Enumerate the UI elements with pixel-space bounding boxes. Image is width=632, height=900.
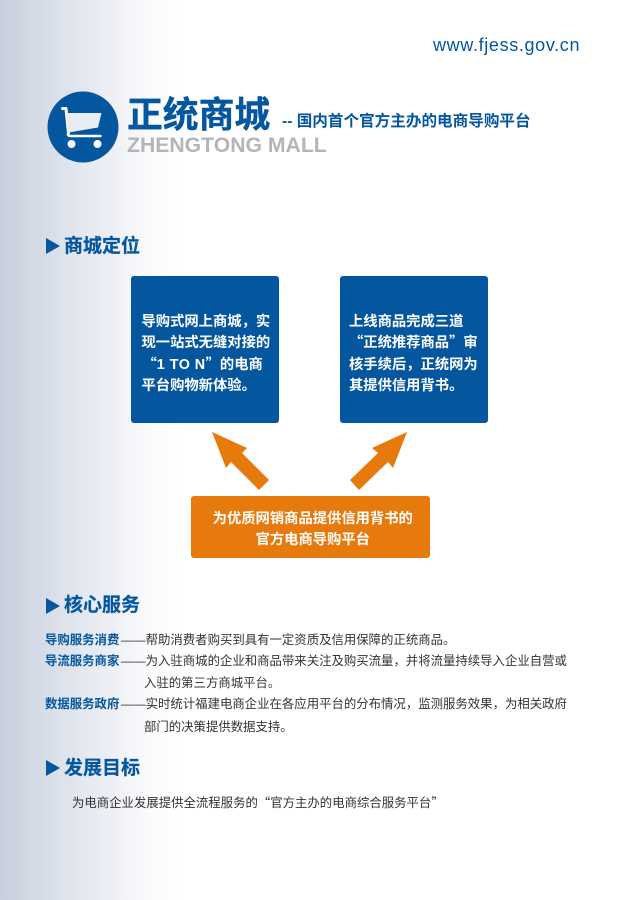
right box text: 上线商品完成三道 xyxy=(349,314,463,330)
left box text: 导购式网上商城，实 xyxy=(142,310,270,331)
english title: ZHENGTONG MALL xyxy=(127,134,327,157)
left box text: 现一站式无缝对接的 xyxy=(142,335,270,351)
title: 正统商城 xyxy=(127,95,270,135)
orange box text: 官方电商导购平台 xyxy=(256,532,370,548)
website url: www.fjess.gov.cn xyxy=(433,35,580,55)
orange box text xyxy=(213,510,413,548)
service 3 continued: 部门的决策提供数据支持。 xyxy=(144,720,293,734)
service 1: 导购服务消费——帮助消费者购买到具有一定资质及信用保障的正统商品。 xyxy=(45,633,455,647)
service 3: 数据服务政府——实时统计福建电商企业在各应用平台的分布情况，监测服务效果，为相关政府 xyxy=(45,694,567,712)
service 2: 导流服务商家——为入驻商城的企业和商品带来关注及购买流量，并将流量持续导入企业自营或 xyxy=(45,651,567,669)
goals text: 为电商企业发展提供全流程服务的“官方主办的电商综合服务平台” xyxy=(72,793,444,811)
heading: positioning: 商城定位 xyxy=(64,236,140,256)
left box text: “1 TO N”的电商 xyxy=(142,353,263,374)
heading: core services: 核心服务 xyxy=(64,595,140,616)
section marker: core services xyxy=(46,598,60,614)
service 2 continued: 入驻的第三方商城平台。 xyxy=(144,676,280,690)
subtitle: -- 国内首个官方主办的电商导购平台 xyxy=(282,113,531,130)
panel: left blue box xyxy=(131,276,279,423)
left box text: 平台购物新体验。 xyxy=(142,378,256,394)
panel: orange box xyxy=(191,496,430,558)
section marker: goals xyxy=(46,760,60,776)
right box text xyxy=(349,314,478,394)
section marker: positioning xyxy=(46,238,60,254)
right box text: 核手续后，正统网为 xyxy=(349,353,478,374)
panel: right blue box xyxy=(340,276,488,423)
right box text: “正统推荐商品”审 xyxy=(349,331,478,352)
left box text xyxy=(142,310,270,394)
heading: goals: 发展目标 xyxy=(64,758,140,779)
arrow: orange up-right xyxy=(350,432,407,490)
icon: shopping cart badge xyxy=(48,92,118,162)
orange box text: 为优质网销商品提供信用背书的 xyxy=(213,511,413,527)
right box text: 其提供信用背书。 xyxy=(349,378,463,394)
arrow: orange up-left xyxy=(212,432,269,490)
